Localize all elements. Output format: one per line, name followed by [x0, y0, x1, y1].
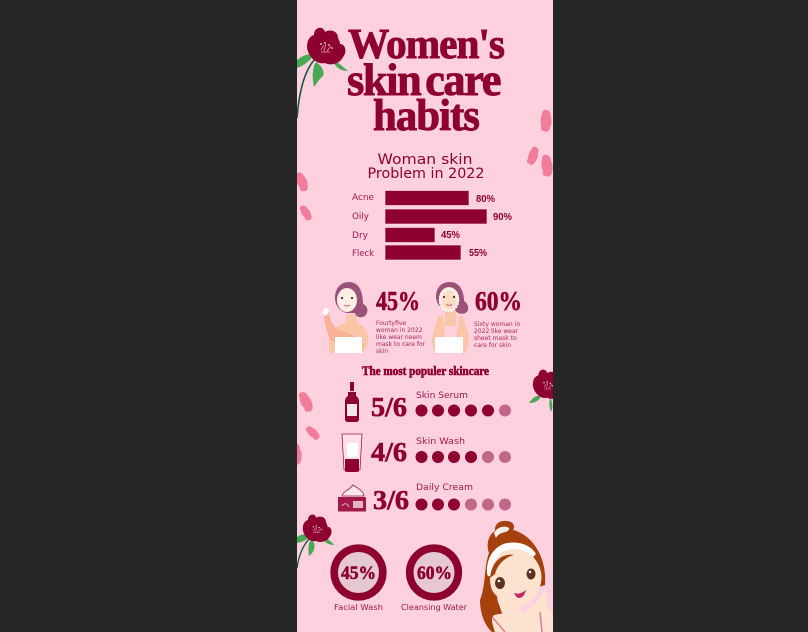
stat: 45%: 45% [376, 286, 420, 316]
stat: 60%: sheet mask to [474, 335, 517, 342]
stat: 60% [474, 286, 522, 349]
stat: 45%: like wear neem [376, 334, 422, 341]
icon: top flower [297, 28, 348, 118]
title [347, 22, 505, 140]
stat: 45%: Fourtyfive [376, 320, 406, 327]
bar chart: Acne [352, 193, 374, 203]
stat: 60%: care for skin [474, 342, 511, 349]
donut: cleansing water: 60% [417, 563, 452, 584]
stat: 45%: woman in 2022 [376, 327, 423, 334]
stat: 60%: 2022 like wear [474, 328, 519, 335]
icon: woman with neem mask [322, 282, 368, 353]
donut: facial wash [330, 544, 387, 612]
donut: facial wash: Facial Wash [334, 603, 383, 612]
row: daily cream: Daily Cream [416, 483, 473, 493]
bar chart: Oily [352, 212, 370, 222]
bar chart: Fleck [352, 249, 375, 259]
icon: right flower [529, 370, 553, 412]
stat: 60%: Sixty woman in [474, 321, 520, 328]
row: daily cream [338, 483, 511, 515]
row: skin serum: 5/6 [371, 392, 407, 422]
stat: 60%: 60% [475, 286, 522, 316]
row: skin serum [345, 382, 511, 422]
donut: cleansing water [401, 544, 468, 612]
icon: lower flower [297, 515, 334, 568]
row: skin wash [342, 434, 511, 472]
bar chart: Dry [352, 231, 369, 241]
row: skin wash: 4/6 [371, 437, 407, 467]
title: skin care [347, 54, 501, 105]
bar chart: 80% [476, 194, 495, 205]
bar chart [352, 190, 512, 260]
heading: most popular skincare: The most populer skincare [362, 363, 489, 378]
row: skin serum: Skin Serum [416, 391, 468, 401]
donut: cleansing water: Cleansing Water [401, 603, 468, 612]
panel: poster [297, 0, 553, 632]
heading: skin problem: Problem in 2022 [368, 166, 484, 182]
title: Women's [348, 22, 505, 68]
illustration: girl with headband [480, 521, 553, 632]
decorative petals [290, 109, 553, 465]
icon: woman with sheet mask [432, 282, 469, 353]
stat: 45%: skin [376, 348, 388, 355]
heading: skin problem: Woman skin [378, 152, 472, 168]
stat: 45% [376, 286, 426, 355]
title: habits [373, 91, 480, 140]
bar chart: 90% [493, 212, 512, 223]
bar chart: 55% [469, 248, 487, 259]
heading: skin problem [368, 152, 484, 182]
row: daily cream: 3/6 [373, 485, 409, 515]
donut: facial wash: 45% [341, 563, 376, 584]
row: skin wash: Skin Wash [416, 437, 465, 447]
bar chart: 45% [441, 230, 460, 241]
stat: 45%: mask to care for [376, 341, 426, 348]
